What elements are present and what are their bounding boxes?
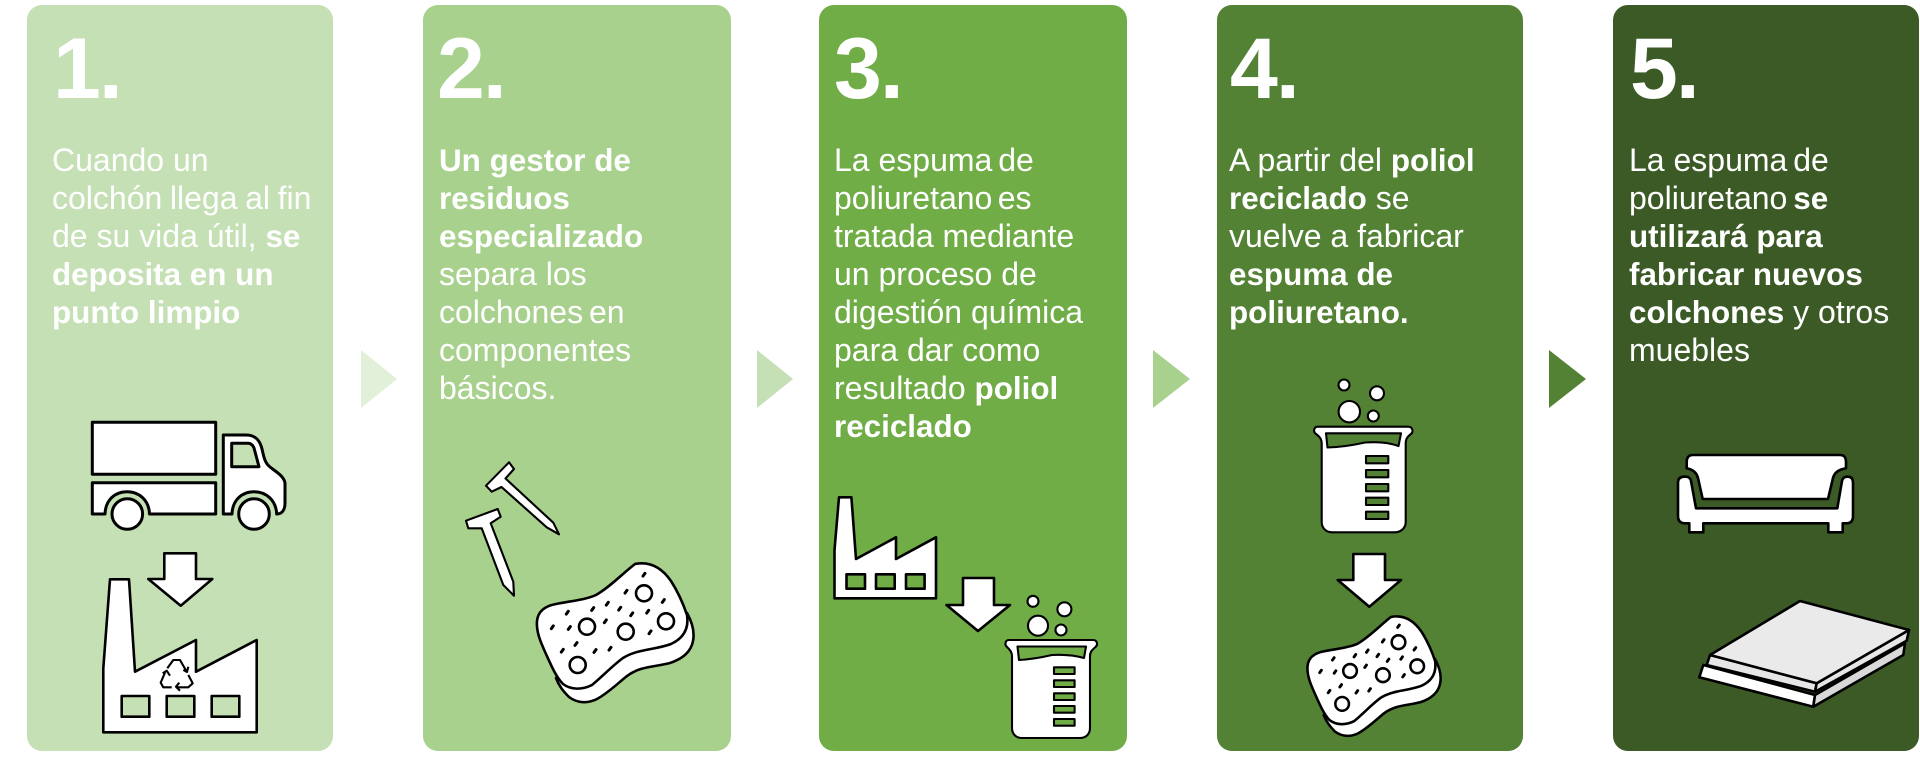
- text: step 2 description: básicos.: [439, 370, 556, 406]
- panel: step 4: [1217, 5, 1523, 751]
- icon: down arrow: [1338, 554, 1401, 607]
- icon: recycling symbol: [161, 660, 193, 691]
- text: step 4 description: A partir del poliol: [1229, 142, 1475, 178]
- text: step 3 description: para dar como: [834, 332, 1040, 368]
- panel: step 3: [819, 5, 1127, 751]
- text: step 5 description: poliuretano se: [1629, 180, 1828, 216]
- text: step 4 description: [1229, 142, 1475, 330]
- text: step 3 description: digestión química: [834, 294, 1083, 330]
- text: step 3 description: reciclado: [834, 409, 972, 444]
- text: step 4 description: poliuretano.: [1229, 295, 1409, 330]
- text: step 1 description: de su vida útil, se: [52, 218, 300, 254]
- text: step 4 description: espuma de: [1229, 257, 1393, 292]
- text: step 1 description: colchón llega al fin: [52, 180, 311, 216]
- text: step 2 description: residuos: [439, 181, 570, 216]
- number 5: 5.: [1630, 21, 1698, 117]
- text: step 1 description: deposita en un: [52, 257, 274, 292]
- text: step 2 description: separa los: [439, 256, 587, 292]
- icon: truck: [92, 422, 285, 529]
- text: step 3 description: poliuretano es: [834, 180, 1032, 216]
- panel: step 1: [27, 5, 333, 751]
- text: step 3 description: un proceso de: [834, 256, 1037, 292]
- icon: down arrow: [946, 578, 1010, 631]
- icon: sofa: [1678, 455, 1853, 532]
- text: step 5 description: utilizará para: [1629, 219, 1823, 254]
- arrow: step 3 to 4: [1153, 350, 1190, 408]
- icon: factory: [834, 497, 936, 598]
- arrow: step 1 to 2: [361, 350, 397, 408]
- icon: recycling factory: [103, 579, 257, 732]
- panel: step 2: [423, 5, 731, 751]
- text: step 3 description: tratada mediante: [834, 218, 1074, 254]
- text: step 2 description: Un gestor de: [439, 143, 631, 178]
- icon: beaker with bubbles: [1005, 596, 1097, 738]
- number 4: 4.: [1230, 21, 1298, 117]
- panel: step 5: [1613, 5, 1919, 751]
- text: step 5 description: La espuma de: [1629, 142, 1829, 178]
- text: step 3 description: La espuma de: [834, 142, 1034, 178]
- icon: down arrow: [148, 553, 212, 606]
- text: step 2 description: colchones en: [439, 294, 625, 330]
- text: step 2 description: componentes: [439, 332, 631, 368]
- text: step 5 description: [1629, 142, 1889, 368]
- arrow: step 2 to 3: [757, 350, 793, 408]
- text: step 2 description: especializado: [439, 219, 643, 254]
- text: step 3 description: [834, 142, 1083, 444]
- text: step 4 description: reciclado se: [1229, 180, 1410, 216]
- text: step 1 description: Cuando un: [52, 142, 209, 178]
- text: step 4 description: vuelve a fabricar: [1229, 218, 1464, 254]
- icon: foam sponge: [537, 563, 694, 702]
- text: step 3 description: resultado poliol: [834, 370, 1058, 406]
- number 2: 2.: [437, 21, 505, 117]
- icon: mattress: [1699, 601, 1909, 707]
- icon: foam sponge: [1307, 616, 1441, 736]
- text: step 5 description: muebles: [1629, 332, 1750, 368]
- text: step 1 description: punto limpio: [52, 295, 240, 330]
- icon: beaker with bubbles: [1314, 380, 1412, 532]
- number 1: 1.: [53, 21, 121, 117]
- number 3: 3.: [834, 21, 902, 117]
- arrow: step 4 to 5: [1549, 350, 1586, 408]
- text: step 2 description: [439, 143, 643, 406]
- text: step 5 description: colchones y otros: [1629, 294, 1889, 330]
- icon: nails: [466, 462, 559, 596]
- text: step 1 description: [52, 142, 311, 330]
- text: step 5 description: fabricar nuevos: [1629, 257, 1863, 292]
